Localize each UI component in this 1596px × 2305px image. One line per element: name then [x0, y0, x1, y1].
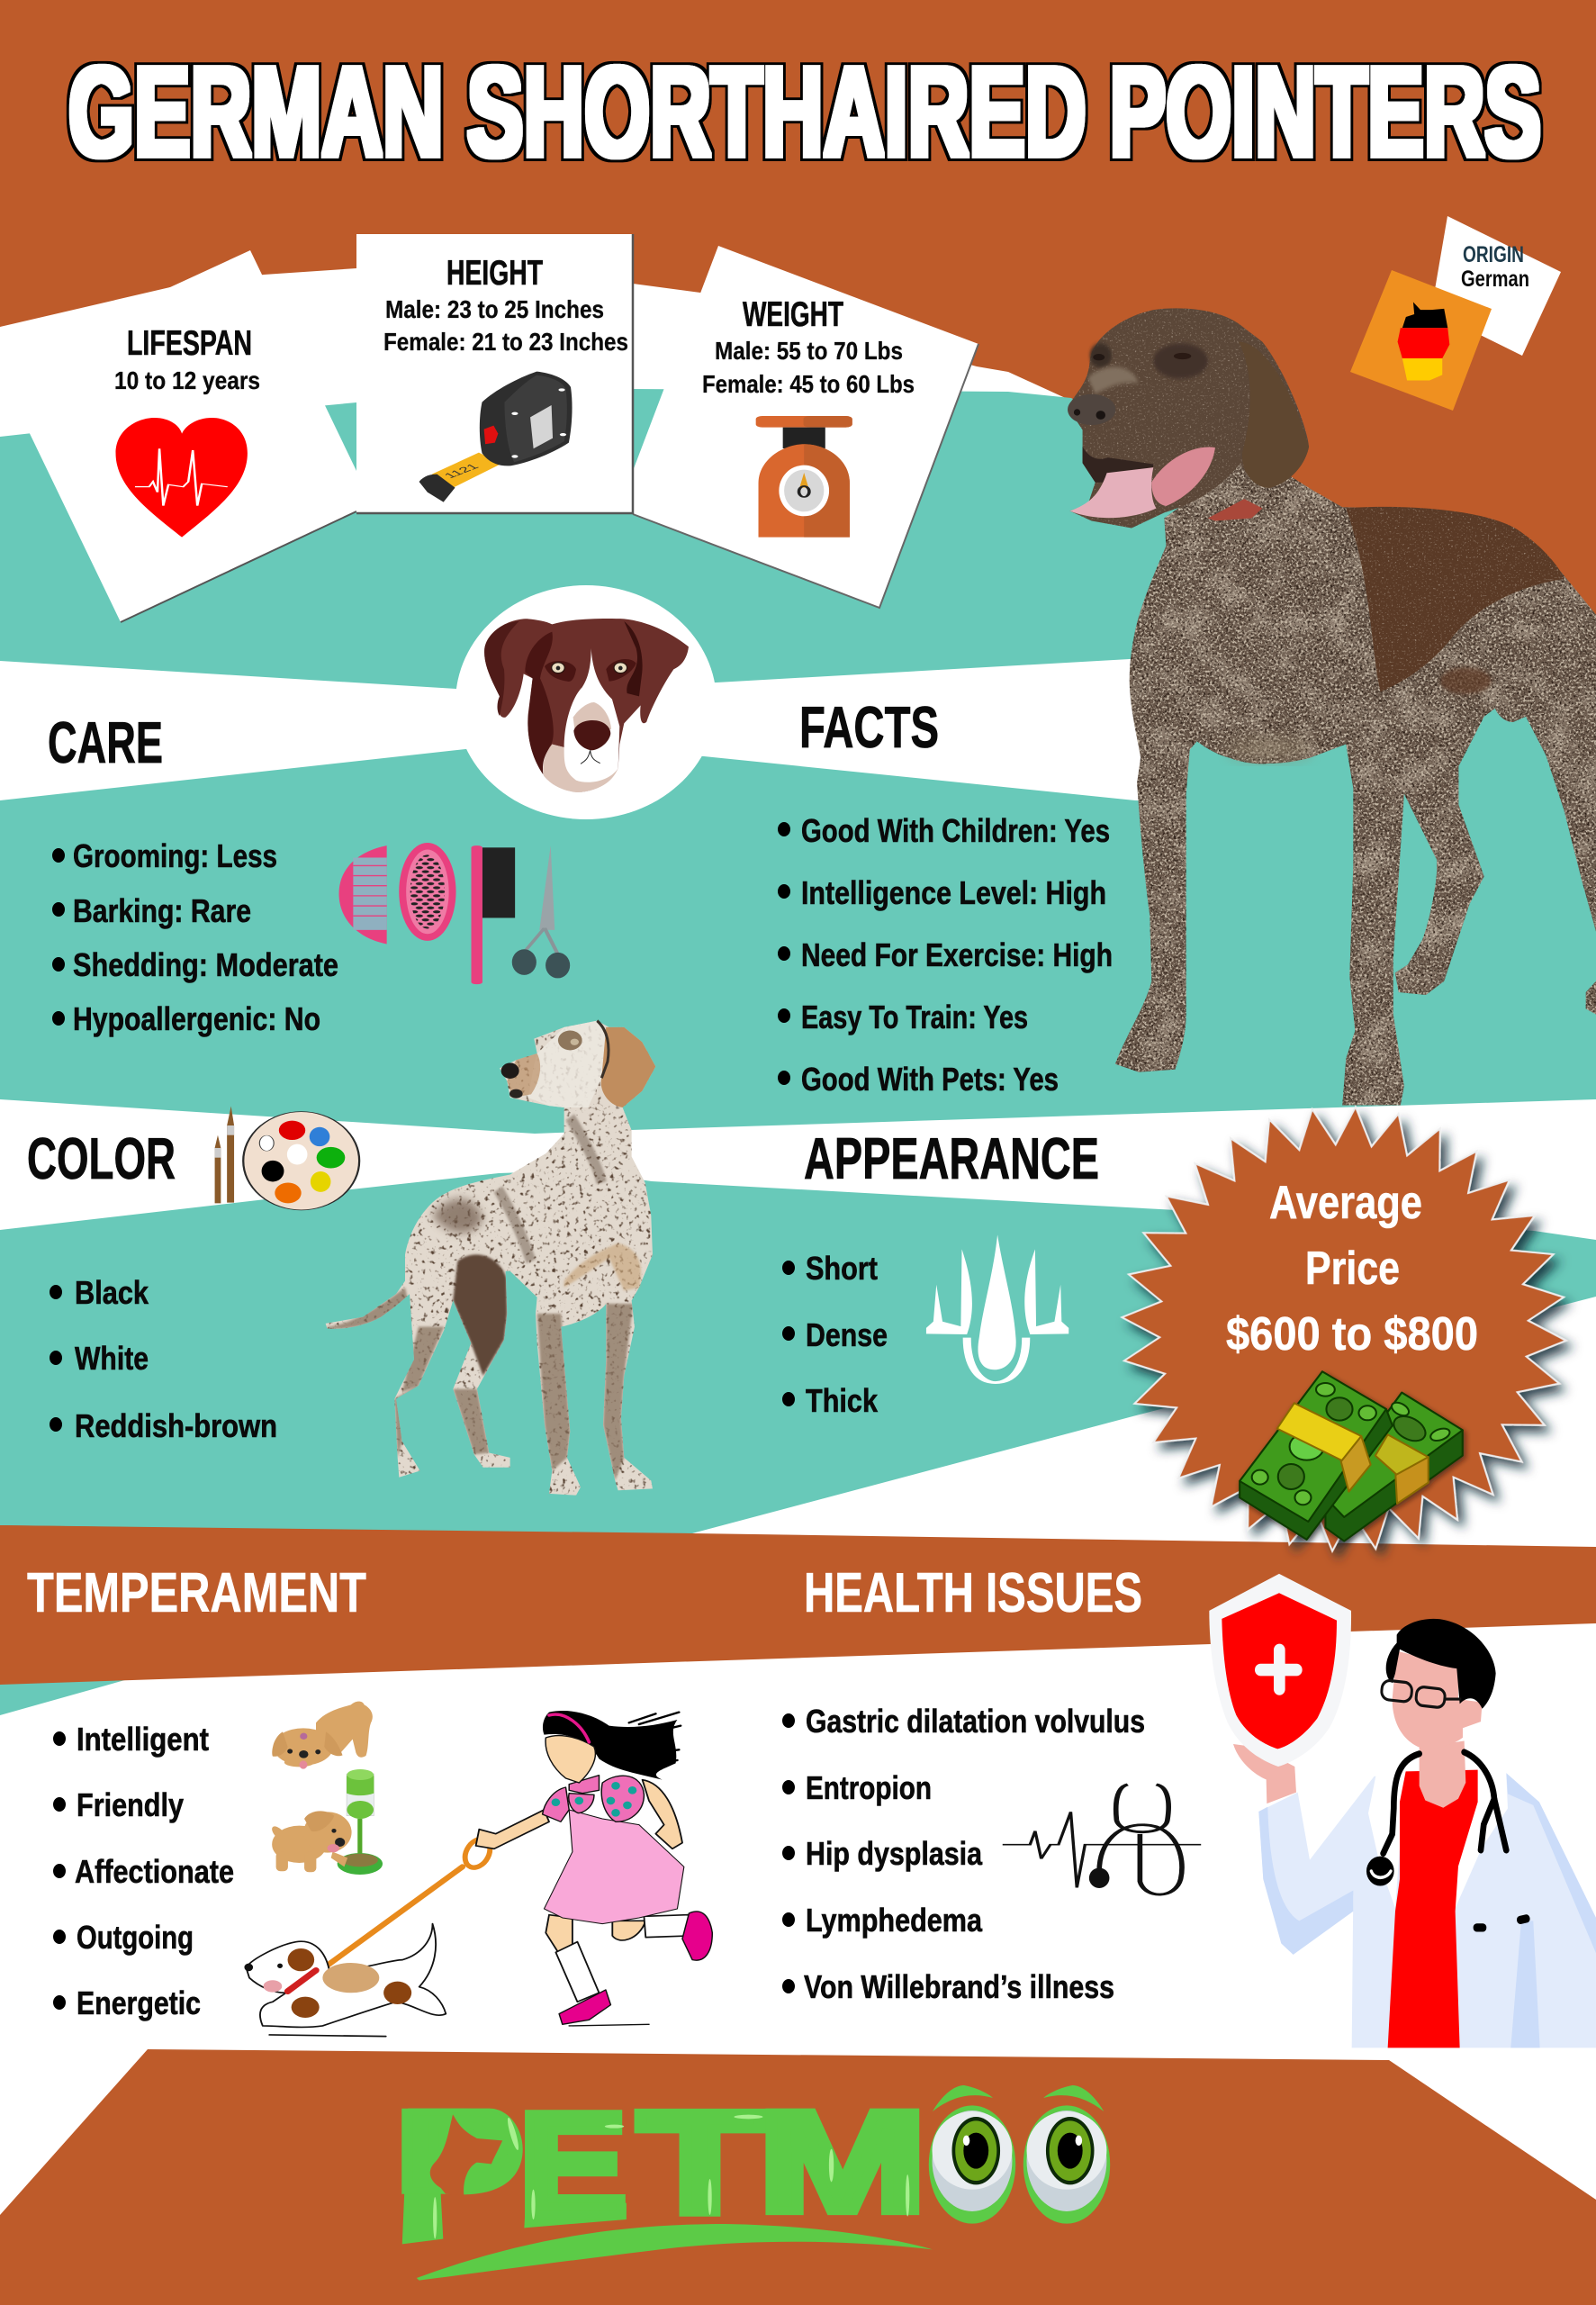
icon: germany flag map [1350, 270, 1492, 411]
logo letters [395, 2083, 927, 2246]
weight male: Male: 55 to 70 Lbs [715, 337, 903, 365]
logo letters: E [518, 2084, 627, 2246]
logo right eye [1023, 2105, 1110, 2224]
height male: Male: 23 to 25 Inches [385, 295, 604, 323]
logo letters: T [638, 2083, 762, 2243]
background: white top band [0, 268, 1071, 468]
small dog muzzle and nose [501, 1021, 609, 1098]
text block: facts list: Intelligence Level: High [801, 874, 1106, 911]
dog eyes and nose [1068, 343, 1208, 425]
text block: temperament list [53, 1721, 234, 2021]
logo left eye [929, 2105, 1015, 2224]
photo: small roan pointer [326, 1021, 655, 1496]
panel: weight card [633, 246, 978, 608]
background: rust footer [0, 2049, 1596, 2305]
logo highlights [433, 2115, 909, 2239]
text block: care list: Shedding: Moderate [73, 946, 338, 983]
heading: facts: FACTS [799, 694, 939, 760]
text block: color list: White [75, 1340, 149, 1377]
background: rust temperament band [0, 1525, 1596, 1685]
illustration: girl walking dog [244, 1711, 712, 2037]
text block: temperament list: Outgoing [77, 1919, 194, 1956]
text block: color list: Reddish-brown [75, 1407, 277, 1444]
icon: stacks of money [1240, 1371, 1463, 1541]
small dog dark thigh [453, 1254, 507, 1376]
background: teal corner [0, 1675, 144, 1715]
height heading: HEIGHT [446, 254, 543, 293]
icon: stethoscope with ecg [1003, 1785, 1201, 1894]
text block: appearance list: Short [806, 1250, 878, 1287]
price value: $600 to $800 [1226, 1308, 1478, 1360]
text block: facts list: Need For Exercise: High [801, 936, 1113, 973]
icon: scale [756, 416, 852, 538]
dog brown saddle [1346, 507, 1564, 692]
origin label: ORIGIN [1463, 242, 1524, 267]
girl legs [546, 1912, 712, 2026]
small dog back patch [432, 1198, 483, 1233]
leash [322, 1835, 495, 1969]
text block: care list [52, 837, 338, 1037]
heading: temperament: TEMPERAMENT [27, 1562, 366, 1624]
doctor stethoscope [1366, 1752, 1506, 1885]
photo: large German Shorthaired Pointer [1068, 308, 1596, 1105]
small dog white face [528, 1021, 606, 1107]
logo letters: M [758, 2083, 927, 2241]
icon: heart with pulse [116, 418, 248, 538]
weight female: Female: 45 to 60 Lbs [702, 370, 915, 398]
icon: grooming tools [339, 843, 570, 984]
text block: facts list [778, 812, 1113, 1098]
logo swoosh [417, 2224, 933, 2281]
icon: cartoon dog head [484, 619, 689, 792]
text block: facts list: Good With Pets: Yes [801, 1061, 1059, 1098]
text block: temperament list: Affectionate [75, 1853, 234, 1890]
doctor coat [1258, 1773, 1596, 2047]
dog open mouth and tongue [1069, 447, 1215, 518]
text block: care list: Barking: Rare [73, 892, 251, 929]
heading: appearance: APPEARANCE [804, 1125, 1099, 1191]
text block: color list [50, 1274, 277, 1444]
text block: care list: Hypoallergenic: No [73, 1000, 320, 1037]
icon: tape measure: 1121 [441, 462, 482, 480]
small dog body [326, 1021, 655, 1496]
text block: temperament list: Intelligent [77, 1721, 209, 1758]
height female: Female: 21 to 23 Inches [383, 328, 628, 356]
text block: care list: Grooming: Less [73, 837, 277, 874]
text block: health issues list: Gastric dilatation volvulus [806, 1703, 1145, 1740]
girl hair [543, 1711, 681, 1780]
doctor coat shading [1258, 1773, 1596, 2047]
text block: facts list: Good With Children: Yes [801, 812, 1110, 849]
dog head [1068, 308, 1309, 529]
text block: color list: Black [75, 1274, 149, 1311]
heading: care: CARE [48, 710, 163, 775]
text block: appearance list [782, 1250, 888, 1419]
text block: temperament list: Friendly [77, 1786, 184, 1823]
logo: PETMOO [395, 2083, 1110, 2281]
small dog chest tan [564, 1243, 641, 1291]
panel: lifespan card [0, 250, 356, 622]
text block: appearance list: Dense [806, 1316, 888, 1353]
text block: health issues list [782, 1703, 1145, 2005]
background: white care and facts band [0, 659, 1170, 801]
shield [1209, 1574, 1351, 1767]
illustration: doctor with shield [1209, 1574, 1596, 2047]
doctor pockets [1474, 1913, 1530, 1932]
price label price: Price [1305, 1243, 1400, 1295]
doctor hand [1233, 1744, 1296, 1803]
heading: health issues: HEALTH ISSUES [804, 1562, 1142, 1624]
doctor red shirt [1388, 1770, 1478, 2047]
dog belly tan [1226, 737, 1313, 760]
girl face [546, 1736, 595, 1783]
doctor face [1393, 1651, 1483, 1749]
small dog neck stripes [498, 1117, 601, 1261]
origin value: German [1461, 267, 1529, 292]
small dog tail and legs [327, 1288, 633, 1480]
girl arms [476, 1780, 682, 1849]
background: white lower right wedge [692, 1297, 1596, 1558]
small dog shading [327, 1117, 633, 1480]
text block: health issues list: Hip dysplasia [806, 1835, 983, 1872]
background: lower white section [0, 1612, 1596, 2305]
doctor neck [1420, 1740, 1465, 1808]
price label average: Average [1269, 1177, 1422, 1229]
running dog [244, 1924, 446, 2037]
text block: appearance list: Thick [806, 1382, 879, 1419]
doctor hair [1386, 1619, 1496, 1709]
doctor glasses [1381, 1680, 1461, 1708]
text block: temperament list: Energetic [77, 1984, 201, 2021]
weight heading: WEIGHT [743, 295, 843, 334]
icon: tape measure [419, 372, 573, 502]
lifespan heading: LIFESPAN [127, 324, 252, 363]
small dog ear [601, 1027, 655, 1107]
icon: paint palette and brushes [215, 1107, 359, 1210]
illustration: puppies and food dispenser [269, 1702, 383, 1875]
background: teal field [0, 389, 1596, 1547]
callout: average price starburst [1110, 1095, 1578, 1563]
heading: color: COLOR [27, 1125, 176, 1191]
girl headband [549, 1714, 589, 1742]
doctor collar [1368, 1758, 1508, 1908]
dog ear [1239, 342, 1309, 488]
icon: hair follicle [926, 1234, 1069, 1383]
panel: origin card [1350, 216, 1561, 411]
logo dog silhouette [430, 2114, 502, 2195]
text block: health issues list: Von Willebrand’s illness [804, 1968, 1114, 2005]
girl dress [544, 1810, 684, 1924]
dog collar [1208, 499, 1262, 521]
girl sleeves [543, 1776, 644, 1821]
panel: height card [356, 234, 633, 513]
background: white color and appearance band [0, 1099, 1596, 1240]
logo letters: P [395, 2087, 517, 2215]
lifespan value: 10 to 12 years [114, 366, 260, 394]
text block: facts list: Easy To Train: Yes [801, 999, 1028, 1035]
text block: health issues list: Entropion [806, 1769, 932, 1806]
white circle behind dog head [455, 585, 717, 819]
logo eyebrows [933, 2085, 1104, 2111]
dog body [1115, 463, 1596, 1105]
text block: health issues list: Lymphedema [806, 1902, 983, 1939]
dog flank patch [1440, 667, 1492, 694]
